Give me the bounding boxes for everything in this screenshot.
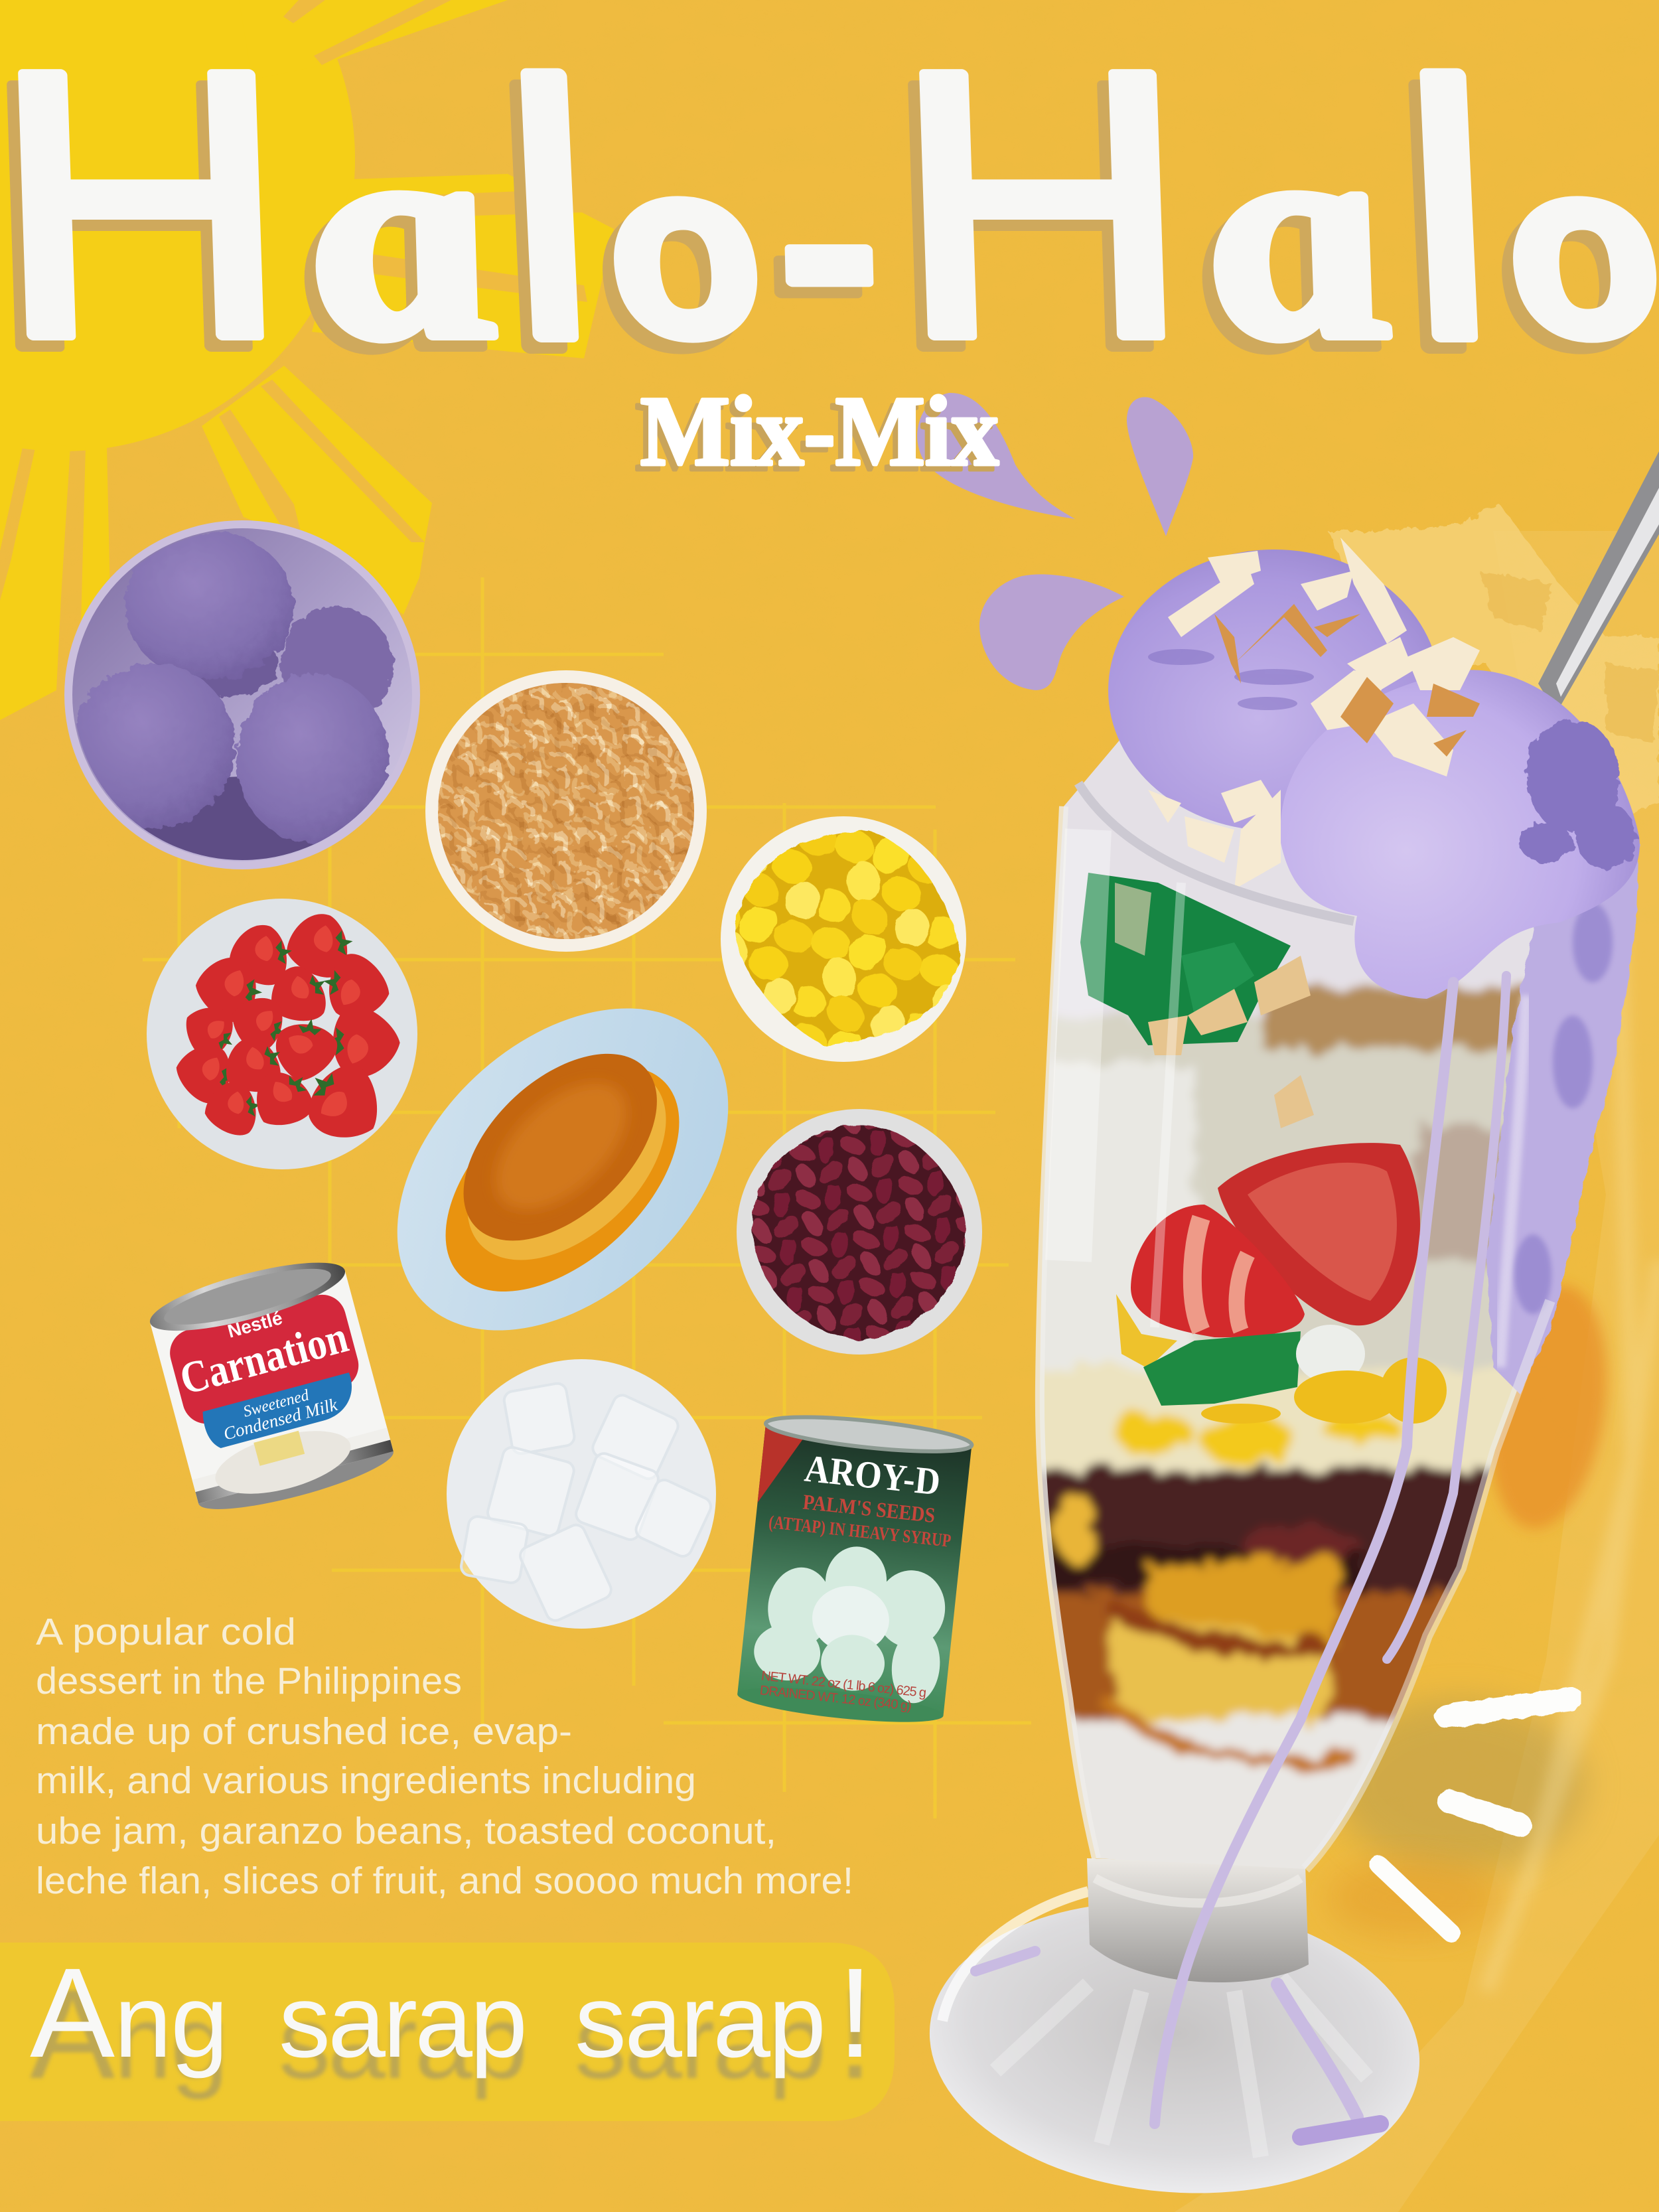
- corn and green jelly lower: [1116, 1294, 1447, 1424]
- description paragraph: [36, 1611, 853, 1902]
- ingredient: sweetened condensed milk can: Sweetened: [242, 1386, 311, 1421]
- purple syrup drips: [975, 976, 1506, 2137]
- faded enlarged glass ghost image at right: [1175, 504, 1659, 2212]
- ingredient: corn bowl: [721, 816, 966, 1062]
- description paragraph: A popular cold: [36, 1611, 296, 1653]
- ingredient: canned palm seeds: PALM'S SEEDS: [802, 1489, 936, 1527]
- ingredient: sweetened condensed milk can: Carnation: [175, 1311, 353, 1404]
- ingredient: ice cubes plate: [447, 1359, 716, 1629]
- title: -: [738, 92, 910, 392]
- decorative grid lines behind the ingredients: [143, 577, 1031, 1818]
- coconut flakes over the ice: [1148, 956, 1314, 1128]
- halo-halo sundae glass: [917, 538, 1659, 2212]
- description paragraph: leche flan, slices of fruit, and soooo much more!: [36, 1860, 853, 1902]
- description paragraph: milk, and various ingredients including: [36, 1759, 696, 1802]
- description paragraph: made up of crushed ice, evap-: [36, 1710, 572, 1753]
- ingredient: canned palm seeds: (ATTAP) IN HEAVY SYRUP: [768, 1512, 952, 1552]
- sun illustration with rays: [0, 0, 614, 720]
- title: [0, 0, 1659, 415]
- ingredient: strawberries plate: [147, 899, 417, 1169]
- ube scoops with melt and toasted coconut: [1108, 538, 1640, 1394]
- tagline banner: sarap: [575, 1964, 826, 2079]
- ingredient: sweetened condensed milk can: [144, 1249, 398, 1522]
- title: o: [573, 110, 789, 388]
- ingredient: sweetened condensed milk can: Nestlé: [226, 1307, 285, 1342]
- glass walls, rim and highlights: [1040, 783, 1550, 1869]
- title: H: [839, 0, 1238, 415]
- title: a: [269, 72, 525, 400]
- title: l: [457, 11, 642, 411]
- icon: white sparkle dashes: [1379, 1699, 1571, 1933]
- green jelly upper: [1080, 873, 1291, 1045]
- icon: purple splash drops: [917, 393, 1193, 690]
- ingredient: canned palm seeds: NET WT. 22 oz (1 lb 6 oz) 625 g: [760, 1668, 927, 1700]
- title: a: [1167, 72, 1419, 400]
- tagline banner: sarap: [279, 1964, 528, 2079]
- description paragraph: dessert in the Philippines: [36, 1660, 462, 1702]
- icon: spoon handle: [1538, 451, 1659, 713]
- description paragraph: ube jam, garanzo beans, toasted coconut,: [36, 1810, 776, 1852]
- ingredient: canned palm seeds: DRAINED WT. 12 oz (340 g): [759, 1683, 912, 1714]
- glass stem: [1087, 1858, 1309, 1982]
- tagline banner: [0, 1941, 895, 2121]
- title: l: [1356, 11, 1542, 411]
- tagline banner: A: [30, 1941, 115, 2084]
- ingredient: canned palm seeds: AROY-D: [802, 1446, 942, 1504]
- ingredient: canned palm seeds: [736, 1410, 973, 1729]
- ingredient: leche flan on plate: [335, 945, 790, 1394]
- tagline banner: !: [837, 1941, 873, 2084]
- strawberry slices: [1131, 1143, 1420, 1337]
- tagline banner: ng: [114, 1964, 228, 2079]
- ingredient: sweetened condensed milk can: Condensed Milk: [221, 1394, 340, 1444]
- ingredient: toasted coconut bowl: [425, 670, 707, 952]
- ingredient: ube ice cream bowl: [64, 520, 420, 869]
- layered dessert contents: [1040, 741, 1534, 1869]
- ingredient: red beans plate: [737, 1109, 982, 1355]
- glass foot: [917, 1882, 1432, 2212]
- subtitle: Mix-Mix: [640, 376, 999, 486]
